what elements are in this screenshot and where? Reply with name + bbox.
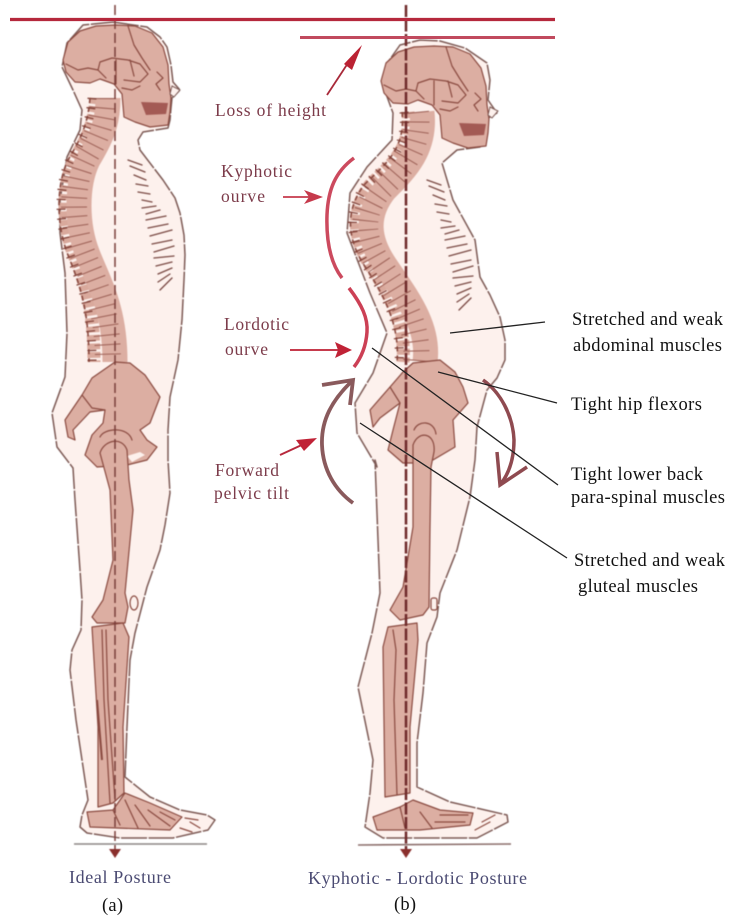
label: tight hip flexors: Tight hip flexors xyxy=(571,395,702,415)
label: stretched and weak gluteal muscles: Stretched and weak xyxy=(574,551,726,571)
caption: ideal posture: Ideal Posture xyxy=(69,867,171,887)
pelvis (a) xyxy=(65,362,160,467)
down arrow (b) xyxy=(400,849,412,858)
label: loss of height: Loss of height xyxy=(215,100,326,120)
label: forward pelvic tilt: Forward xyxy=(215,460,279,480)
label: tight lower back para-spinal muscles: Tight lower back xyxy=(571,465,704,485)
vertical plumb line (b) xyxy=(405,5,407,850)
label: stretched and weak gluteal muscles xyxy=(574,551,726,597)
label: stretched and weak abdominal muscles xyxy=(572,310,724,356)
label: stretched and weak gluteal muscles: gluteal muscles xyxy=(578,577,698,597)
ground line (b) xyxy=(358,844,511,845)
caption: (b): (b) xyxy=(394,895,416,915)
label: forward pelvic tilt line two: pelvic tilt xyxy=(214,483,289,503)
leader: gluteal muscles xyxy=(360,423,567,558)
caption: (a): (a) xyxy=(102,896,123,916)
leader: abdominal muscles xyxy=(450,322,545,333)
figure (a): ideal posture xyxy=(52,5,215,858)
ground line (a) xyxy=(74,843,207,845)
foot bones (b) xyxy=(373,800,495,830)
patella (a) xyxy=(130,596,138,610)
tibia and fibula (a) xyxy=(92,623,129,807)
tibia and fibula (b) xyxy=(383,623,418,797)
height line: reduced xyxy=(300,36,555,39)
pelvis (b) xyxy=(370,360,468,463)
figure (b): kyphotic-lordotic posture xyxy=(347,5,511,858)
centre of gravity line (a) xyxy=(114,5,116,850)
label: lordotic curve: Lordotic xyxy=(224,314,289,334)
arrow: forward pelvic tilt pointer xyxy=(280,438,317,455)
label: kyphotic curve line two: ourve xyxy=(221,186,265,206)
femur (a) xyxy=(92,441,133,623)
label: lordotic curve line two: ourve xyxy=(225,339,268,359)
skull (b) xyxy=(381,46,498,148)
leader: lower back para-spinal muscles xyxy=(372,348,558,485)
spine (b) xyxy=(350,112,426,362)
body outline (b) xyxy=(347,40,508,838)
spine (a) xyxy=(59,98,115,362)
leader: hip flexors xyxy=(438,372,557,403)
down arrow (a) xyxy=(109,849,121,858)
body outline (a) xyxy=(52,22,215,838)
patella (b) xyxy=(431,598,437,610)
arrow: kyphotic curve xyxy=(283,190,323,204)
arrow: loss of height xyxy=(327,45,362,95)
curved arrow: pelvic tilt, front xyxy=(483,380,527,485)
height line: original xyxy=(10,18,555,21)
caption: kyphotic-lordotic posture: Kyphotic - Lordotic Posture xyxy=(308,868,527,888)
label: tight lower back para-spinal muscles xyxy=(571,465,725,508)
label: kyphotic curve: Kyphotic xyxy=(221,161,292,181)
curved arrow: forward pelvic tilt, back xyxy=(322,380,353,503)
femur (b) xyxy=(390,435,434,620)
skull (a) xyxy=(63,25,180,127)
label: tight lower back para-spinal muscles: para-spinal muscles xyxy=(571,488,725,508)
curve marker: lordotic xyxy=(349,288,367,367)
ribs (b) xyxy=(427,180,473,310)
curve marker: kyphotic xyxy=(327,158,354,278)
label: stretched and weak abdominal muscles: Stretched and weak xyxy=(572,310,724,330)
ribs (a) xyxy=(128,160,174,290)
foot bones (a) xyxy=(87,793,200,832)
label: stretched and weak abdominal muscles: abdominal muscles xyxy=(573,336,722,356)
arrow: lordotic curve xyxy=(290,342,352,358)
